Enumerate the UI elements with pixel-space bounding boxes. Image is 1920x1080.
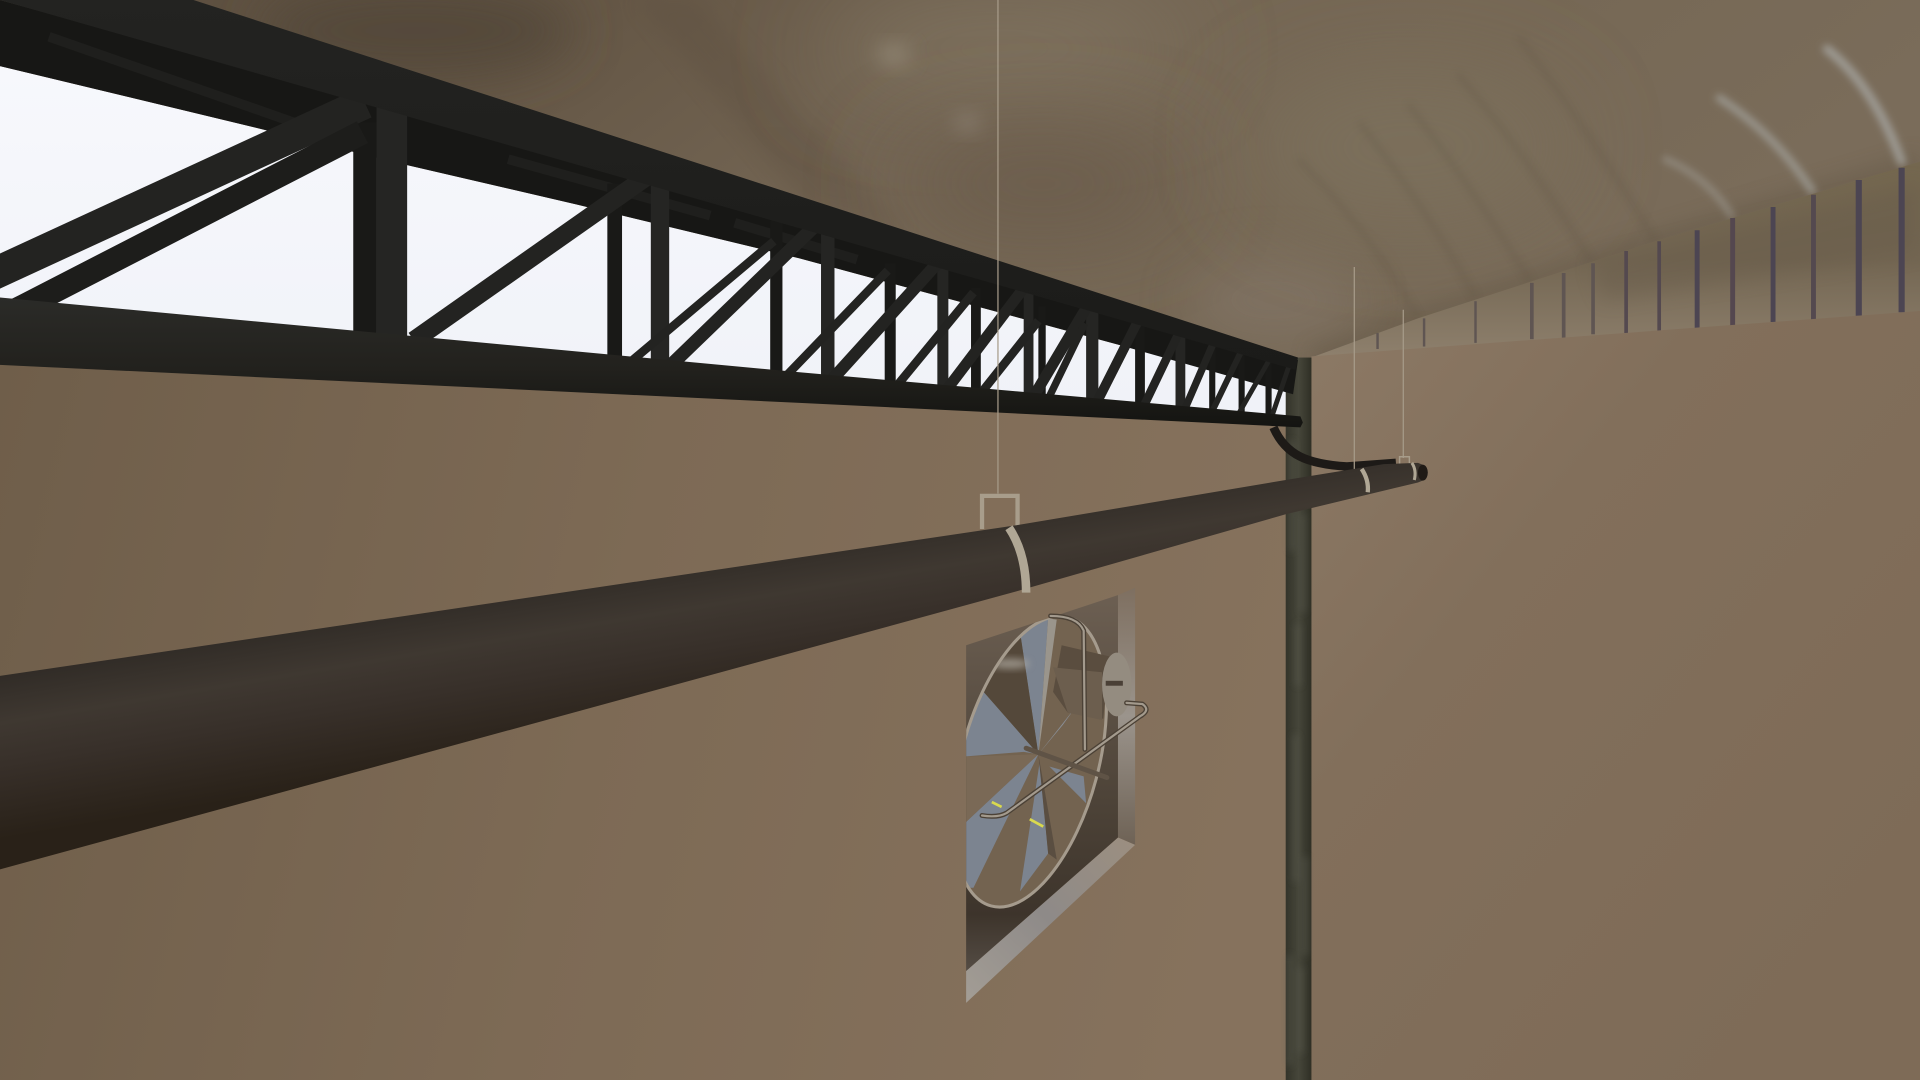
- truss diagonals: [0, 103, 1291, 422]
- front top chord: [0, 0, 1298, 370]
- hanger bracket: [982, 457, 1409, 529]
- window right reveal: [1118, 588, 1135, 845]
- ceiling: [0, 0, 1920, 367]
- truss back chord detail: [49, 37, 857, 260]
- ceiling edge shadow: [1336, 314, 1430, 348]
- left wall: [0, 365, 1286, 1080]
- fan guard rod: [982, 616, 1146, 816]
- fan ring: [966, 616, 1108, 909]
- right wall: [1311, 311, 1920, 1080]
- hanger wires: [998, 0, 1403, 493]
- truss verticals: [365, 104, 1269, 421]
- steel column: [1286, 358, 1311, 1080]
- fan gaps and blades: [961, 618, 1086, 891]
- back top chord: [0, 0, 1298, 394]
- corrugated end wall panel: [1311, 162, 1920, 358]
- front bottom chord: [0, 298, 1303, 427]
- sky opening: [0, 66, 1292, 419]
- ceiling ribs: [1298, 37, 1656, 318]
- main pipe: [0, 463, 1428, 869]
- fan motor: [1053, 645, 1131, 720]
- ceiling light streaks: [1665, 49, 1902, 216]
- truss: [0, 0, 1303, 427]
- conduit: [1273, 427, 1396, 467]
- pipe straps: [1009, 463, 1415, 593]
- fan window: [966, 595, 1149, 1003]
- window bottom reveal: [966, 838, 1135, 1003]
- fan disc: [966, 618, 1105, 906]
- window interior: [966, 595, 1118, 971]
- fan yellow marks: [992, 802, 1043, 827]
